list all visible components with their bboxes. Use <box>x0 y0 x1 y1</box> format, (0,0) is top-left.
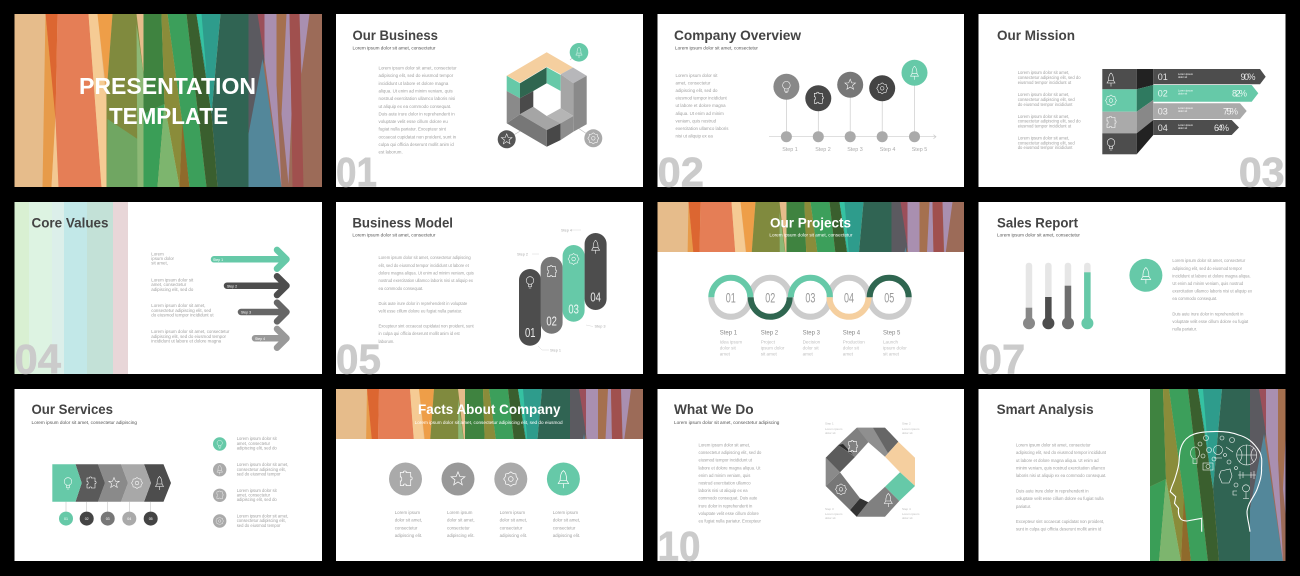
heading: Facts About Company <box>418 401 561 417</box>
corner captions <box>825 422 920 520</box>
step labels: Step 1 <box>720 330 738 336</box>
step labels: Step 5 <box>912 147 927 153</box>
diagram icons <box>836 441 892 507</box>
body text: incididunt ut labore et dolore magna aliqua. <box>1172 273 1251 278</box>
column text: consectetur <box>500 525 523 530</box>
icon: puzzle <box>805 85 831 111</box>
body text: aliqua. Ut enim ad minim <box>676 111 724 116</box>
subtitle: Lorem ipsum dolor sit amet, consectetur <box>769 232 853 238</box>
body text: occaecat cupidatat non proident, sunt in <box>378 134 457 139</box>
column text: dolor sit amet, <box>553 518 580 523</box>
body text: dolore magna aliqua. Ut enim ad minim veniam, quis <box>378 270 474 276</box>
step pills diagram <box>517 228 607 352</box>
body text: Excepteur sint occaecat cupidatat non proident, <box>1016 519 1104 524</box>
step labels <box>517 228 605 352</box>
body text <box>1016 442 1107 531</box>
text blocks: consectetur adipiscing elit, sed <box>1018 140 1075 145</box>
icon: star <box>498 130 516 148</box>
arrow 4 <box>255 329 286 348</box>
heading: Sales Report <box>997 215 1078 231</box>
bar labels <box>1158 72 1256 133</box>
bar captions <box>1178 72 1193 130</box>
corner captions: Step 1 <box>825 422 834 426</box>
step labels: Step 3 <box>847 147 863 153</box>
body text: exercitation ullamco laboris nisi ut aliquip ex <box>1172 289 1252 294</box>
bar captions: dolor sit <box>1178 75 1187 79</box>
slide 7: our projects <box>658 202 966 375</box>
corner captions: dolor sit <box>902 516 913 520</box>
page number: 01 <box>336 148 377 196</box>
corner captions: dolor sit <box>902 431 913 435</box>
column text: consectetur <box>553 525 576 530</box>
service list: consectetur adipiscing elit, <box>237 467 286 472</box>
icon: pin <box>1129 259 1162 292</box>
column text: dolor sit amet, <box>447 518 475 523</box>
body text: nostrud exercitation ullamco <box>698 480 751 486</box>
slide 5: core values <box>14 202 322 382</box>
body text: velit esse cillum dolore eu fugiat nulla pariatur. <box>378 308 462 313</box>
bar labels: 03 <box>1158 106 1168 116</box>
body text: pariatur. <box>1016 504 1031 509</box>
cover title <box>79 73 256 129</box>
bar captions: Lorem ipsum <box>1178 72 1193 76</box>
body text: nulla pariatur. <box>1172 327 1197 332</box>
bar captions: dolor sit <box>1178 126 1187 130</box>
body text: laborum. <box>378 339 394 344</box>
text blocks: adipiscing elit, sed do <box>151 287 194 292</box>
body text: amet, consectetur <box>676 80 711 85</box>
subtitle: Lorem ipsum dolor sit amet, consectetur adipiscing <box>32 420 138 425</box>
body text: culpa qui officia deserunt mollit anim id <box>378 142 454 147</box>
step labels: Step 2 <box>761 330 779 336</box>
step descriptions: amet <box>843 352 854 356</box>
text blocks: consectetur adipiscing elit, sed <box>151 308 212 313</box>
body text: ut labore et dolore magna aliqua. Ut enim ad <box>1016 458 1099 463</box>
column text: Lorem ipsum <box>500 510 525 515</box>
text blocks: Lorem ipsum dolor sit amet, <box>151 303 205 308</box>
text blocks: Lorem ipsum dolor sit amet, <box>1018 136 1069 140</box>
column text: adipiscing elit. <box>553 533 580 538</box>
coloured side panel <box>1150 389 1286 561</box>
slide 11: what we do <box>658 389 964 570</box>
text blocks: incididunt ut labore et dolore magna <box>151 339 222 344</box>
column text: consectetur <box>395 525 418 530</box>
step labels <box>720 330 901 336</box>
heading: Business Model <box>352 215 453 231</box>
icon: bulb <box>773 74 799 100</box>
text blocks: Lorem ipsum dolor sit amet, <box>1018 92 1069 97</box>
column text: adipiscing elit. <box>500 533 527 538</box>
body text: Duis aute irure dolor in reprehenderit in voluptate <box>378 301 468 306</box>
body text: eiusmod tempor incididunt ut <box>698 458 753 463</box>
text blocks: amet, consectetur <box>151 282 187 287</box>
body text: commodo consequat. Duis aute <box>698 496 758 501</box>
arrow 3 <box>241 303 286 321</box>
numbered dots: 02 <box>85 517 89 521</box>
step labels: Step 4 <box>561 228 572 232</box>
numbered dots: 03 <box>106 517 110 521</box>
icon: pin <box>902 60 928 86</box>
body text: ut labore et dolore magna <box>676 103 726 108</box>
cover title: PRESENTATION <box>79 73 256 99</box>
bar captions: dolor sit <box>1178 109 1187 113</box>
numbered dots <box>59 512 158 526</box>
body text: minim veniam, quis nostrud exercitation ullamco <box>1016 465 1106 470</box>
step descriptions: ipsum dolor <box>883 346 907 350</box>
step descriptions: Idea ipsum <box>720 340 742 344</box>
arrow 3: Step 3 <box>241 311 251 315</box>
heading: Our Mission <box>997 27 1075 43</box>
icon: head with brain symbols <box>1170 431 1262 532</box>
body text: labore et dolore magna aliqua. Ut <box>698 465 761 470</box>
body text: Lorem ipsum dolor sit <box>676 73 718 78</box>
bar labels: 90% <box>1240 72 1256 82</box>
step descriptions: dolor sit <box>720 346 737 350</box>
body text: voluptate velit esse cillum dolore eu <box>378 119 448 124</box>
page number: 03 <box>1239 148 1285 196</box>
timeline chart <box>769 60 936 153</box>
step descriptions: Project <box>761 340 776 344</box>
step labels: Step 1 <box>782 147 798 153</box>
text blocks: consectetur adipiscing elit, sed <box>1018 97 1075 102</box>
step labels: Step 2 <box>815 147 831 153</box>
service list: Lorem ipsum dolor sit amet, <box>237 514 288 518</box>
heading: Company Overview <box>674 27 801 43</box>
icon: pin <box>547 462 580 496</box>
chevron process diagram <box>52 464 171 526</box>
text blocks: consectetur adipiscing elit, sed do <box>1018 75 1081 80</box>
body text: veniam, quis nostrud <box>676 118 717 123</box>
body text: Lorem ipsum dolor sit amet, consectetur <box>1172 258 1246 263</box>
column text: Lorem ipsum <box>395 510 420 515</box>
arrow 1 <box>213 250 286 269</box>
page number: 07 <box>979 336 1025 382</box>
body text: voluptate velit esse cillum dolore eu fugiat <box>1172 319 1249 324</box>
column text: adipiscing elit. <box>447 533 475 538</box>
step labels: Step 4 <box>843 330 861 336</box>
text blocks: consectetur adipiscing elit, sed do <box>1018 119 1081 124</box>
body text: exercitation ullamco laboris <box>676 126 729 131</box>
body text: ea commodo consequat. <box>1172 296 1217 301</box>
service list: Lorem ipsum dolor sit <box>237 488 278 493</box>
arrow 2: Step 2 <box>227 284 237 288</box>
service list: Lorem ipsum dolor sit <box>237 436 278 441</box>
arrow 4: Step 4 <box>255 337 265 341</box>
body text: adipiscing elit, sed do eiusmod tempor incididunt <box>1016 450 1107 455</box>
slide 3: company overview <box>658 14 964 196</box>
body text: nostrud exercitation ullamco laboris nisi <box>378 96 455 101</box>
body text: ea commodo consequat. <box>378 286 423 291</box>
ring numbers: 04 <box>844 289 854 305</box>
text blocks: Lorem ipsum dolor sit <box>151 278 194 282</box>
bar labels: 02 <box>1158 88 1168 98</box>
service list: adipiscing elit, sed do <box>237 446 277 451</box>
page number: 05 <box>336 336 381 382</box>
octagon ring diagram <box>825 422 920 520</box>
body text: ut aliquip ex ea commodo consequat. <box>378 104 451 109</box>
coloured header band <box>658 202 964 252</box>
icon: gear <box>584 129 602 147</box>
ring numbers: 03 <box>805 289 816 305</box>
page number: 04 <box>14 336 62 382</box>
body text: adipiscing elit, sed do eiusmod tempor <box>378 73 454 78</box>
ring chain diagram <box>711 278 909 317</box>
corner captions: Lorem ipsum <box>825 427 843 431</box>
subtitle: Lorem ipsum dolor sit amet, consectetur <box>352 46 436 51</box>
numbered dots: 04 <box>127 517 131 521</box>
body text: aliqua. Ut enim ad minim veniam, quis <box>378 88 453 93</box>
slide 12: smart analysis <box>978 389 1300 562</box>
text blocks: eiusmod tempor incididunt ut <box>1018 123 1072 128</box>
text blocks: Lorem ipsum dolor sit amet, <box>1018 114 1069 119</box>
service list: amet, consectetur <box>237 441 271 446</box>
body text: eiusmod tempor incididunt <box>676 96 728 101</box>
slide 1: cover <box>14 14 322 187</box>
text blocks: sit amet, <box>151 261 168 266</box>
bar captions: Lorem ipsum <box>1178 88 1193 92</box>
heading: Core Values <box>32 215 109 231</box>
body text: laboris nisi ut aliquip ex ea <box>698 488 748 493</box>
text blocks: Lorem <box>151 252 164 256</box>
heading: What We Do <box>674 401 754 417</box>
step descriptions: amet <box>720 352 731 356</box>
text blocks: Lorem ipsum dolor sit amet, <box>1018 70 1069 75</box>
heading: Smart Analysis <box>997 401 1094 417</box>
subtitle: Lorem ipsum dolor sit amet, consectetur adipiscing elit, sed do eiusmod <box>415 420 563 425</box>
text blocks <box>151 252 230 344</box>
text blocks: Lorem ipsum dolor sit amet, consectetur <box>151 329 230 334</box>
body text <box>1172 258 1252 332</box>
pill numbers: 04 <box>590 289 601 304</box>
body text: consectetur adipiscing elit, sed do <box>698 450 762 455</box>
bar labels: 75% <box>1223 106 1238 116</box>
text blocks: do eiusmod tempor incididunt <box>1018 145 1073 150</box>
bar labels: 04 <box>1158 123 1168 133</box>
ring numbers: 01 <box>726 289 736 305</box>
body text: eu fugiat nulla pariatur. Excepteur <box>698 518 761 524</box>
chevron icons <box>64 476 164 490</box>
bar labels: 82% <box>1232 88 1247 98</box>
column text: adipiscing elit. <box>395 533 422 538</box>
step descriptions: dolor sit <box>843 346 860 350</box>
heading: Our Services <box>32 401 113 417</box>
body text: nisi ut aliquip ex ea <box>676 134 713 139</box>
body text: incididunt ut labore et dolore magna <box>378 81 449 86</box>
step descriptions: Decision <box>803 340 821 344</box>
service list: consectetur adipiscing elit, <box>237 518 286 523</box>
body text: Lorem ipsum dolor sit amet, consectetur adipiscing <box>378 255 471 260</box>
step labels: Step 3 <box>803 330 821 336</box>
icon: gear <box>494 462 527 496</box>
step labels: Step 1 <box>550 348 561 352</box>
body text: adipiscing elit, sed do <box>676 88 718 93</box>
page number: 10 <box>658 522 700 570</box>
body text: voluptate velit esse cillum dolore <box>698 511 759 516</box>
subtitle: Lorem ipsum dolor sit amet, consectetur <box>675 46 759 51</box>
body text: adipiscing elit, sed do eiusmod tempor <box>1172 266 1243 271</box>
arrow 2 <box>227 276 286 295</box>
body text: elit, sed do eiusmod tempor incididunt ut labore et <box>378 263 470 268</box>
body text: Duis aute irure dolor in reprehenderit in <box>378 111 455 116</box>
bar labels: 64% <box>1214 123 1229 133</box>
step descriptions: Launch <box>883 340 899 344</box>
ring numbers: 02 <box>765 289 775 305</box>
icons <box>1106 73 1116 150</box>
ring numbers: 05 <box>884 289 894 305</box>
body text: Lorem ipsum dolor sit amet, <box>698 442 750 448</box>
pill numbers <box>525 289 601 340</box>
pill icons <box>526 240 600 288</box>
coloured header band <box>336 389 643 439</box>
column text: Lorem ipsum <box>447 510 473 515</box>
corner captions: Lorem ipsum <box>825 512 843 516</box>
text blocks: do eiusmod tempor incididunt ut <box>151 313 214 318</box>
arrow 1: Step 1 <box>213 258 223 262</box>
pill numbers: 01 <box>525 325 536 340</box>
subtitle: Lorem ipsum dolor sit amet, consectetur adipiscing <box>674 420 780 425</box>
bar captions: dolor sit <box>1178 92 1187 96</box>
isometric hexagon diagram <box>498 43 602 148</box>
step descriptions: amet <box>803 352 814 356</box>
corner captions: Step 4 <box>902 507 911 511</box>
icon: star <box>442 462 474 496</box>
bar captions: Lorem ipsum <box>1178 106 1193 110</box>
corner captions: Lorem ipsum <box>902 512 920 516</box>
body text: Excepteur sint occaecat cupidatat non proident, sunt <box>378 324 474 328</box>
numbered dots: 05 <box>149 517 153 521</box>
column text: Lorem ipsum <box>553 510 578 515</box>
slide 9: our services <box>14 389 322 561</box>
body text: Lorem ipsum dolor sit amet, consectetur <box>378 66 457 70</box>
numbered dots: 01 <box>64 517 68 521</box>
folded bar chart <box>1102 69 1266 154</box>
thermometer chart <box>1023 263 1093 329</box>
service list <box>213 436 288 528</box>
body text: irure dolor in reprehenderit in <box>698 503 753 508</box>
bar labels: 01 <box>1158 72 1168 82</box>
bar captions: Lorem ipsum <box>1178 123 1193 127</box>
ring numbers <box>726 289 894 305</box>
service list: Lorem ipsum dolor sit amet, <box>237 462 288 467</box>
icon: star <box>837 72 863 98</box>
body text: in culpa qui officia deserunt mollit anim id est <box>378 331 461 336</box>
subtitle: Lorem ipsum dolor sit amet, consectetur <box>997 232 1081 238</box>
body text: fugiat nulla pariatur. Excepteur sint <box>378 127 447 132</box>
corner captions: dolor sit <box>825 431 836 435</box>
step labels: Step 3 <box>594 324 605 328</box>
corner captions: dolor sit <box>825 516 836 520</box>
body text: Lorem ipsum dolor sit amet, consectetur <box>1016 442 1091 448</box>
step descriptions: ipsum dolor <box>761 346 785 350</box>
body text: Duis aute irure dolor in reprehenderit in <box>1016 488 1089 494</box>
column text: dolor sit amet, <box>500 518 527 523</box>
text blocks: ipsum dolor <box>151 256 175 261</box>
column text: consectetur <box>447 525 470 530</box>
step descriptions <box>720 340 907 356</box>
body text: voluptate velit esse cillum dolore eu fugiat nulla <box>1016 496 1104 501</box>
heading: Our Business <box>352 27 438 43</box>
slide 2: our business <box>336 14 643 196</box>
icon: puzzle <box>389 462 422 496</box>
step labels: Step 5 <box>883 330 901 336</box>
text blocks: do eiusmod tempor incididunt <box>1018 102 1073 107</box>
corner captions: Step 2 <box>902 422 911 426</box>
body text: enim ad minim veniam, quis <box>698 473 750 478</box>
slide 8: sales report <box>978 202 1286 382</box>
body text: est laborum. <box>378 150 403 155</box>
corner captions: Step 3 <box>825 507 834 511</box>
icon: gear <box>869 75 895 101</box>
subtitle: Lorem ipsum dolor sit amet, consectetur <box>352 232 436 238</box>
cover title: TEMPLATE <box>109 103 228 129</box>
body text: Ut enim ad minim veniam, quis nostrud <box>1172 281 1244 286</box>
body text: nostrud exercitation ullamco laboris nisi ut aliquip ex <box>378 278 473 283</box>
column text <box>395 510 580 538</box>
body text: Duis aute irure dolor in reprehenderit in <box>1172 312 1244 316</box>
body text: sunt in culpa qui officia deserunt mollit anim id <box>1016 526 1102 531</box>
service list: adipiscing elit, sed do <box>237 497 277 502</box>
text blocks: eiusmod tempor incididunt ut <box>1018 80 1072 85</box>
step labels <box>782 147 927 153</box>
page number: 02 <box>658 148 704 196</box>
step labels: Step 4 <box>880 147 895 153</box>
step descriptions: dolor sit <box>803 346 819 350</box>
pale colour panel <box>14 202 128 374</box>
body text <box>378 255 474 344</box>
icon: pin <box>570 43 588 62</box>
slide 4: our mission <box>978 14 1286 196</box>
step labels: Step 2 <box>517 252 528 256</box>
step descriptions: Production <box>843 340 865 344</box>
step descriptions: sit amet <box>761 352 778 356</box>
pill numbers: 02 <box>546 313 557 328</box>
service list: sed do eiusmod tempor <box>237 523 281 528</box>
step descriptions: sit amet <box>883 352 900 356</box>
slide 6: business model <box>336 202 643 382</box>
corner captions: Lorem ipsum <box>902 427 920 431</box>
service list: sed do eiusmod tempor <box>237 472 281 477</box>
pill numbers: 03 <box>568 301 579 316</box>
column text: dolor sit amet, <box>395 518 422 523</box>
text blocks <box>1018 70 1081 150</box>
heading: Our Projects <box>770 215 851 231</box>
text blocks: adipiscing elit, sed do eiusmod tempor <box>151 334 227 339</box>
service list: amet, consectetur <box>237 492 271 498</box>
body text: laboris nisi ut aliquip ex ea commodo consequat. <box>1016 473 1106 478</box>
slide 10: facts about company <box>336 389 644 562</box>
